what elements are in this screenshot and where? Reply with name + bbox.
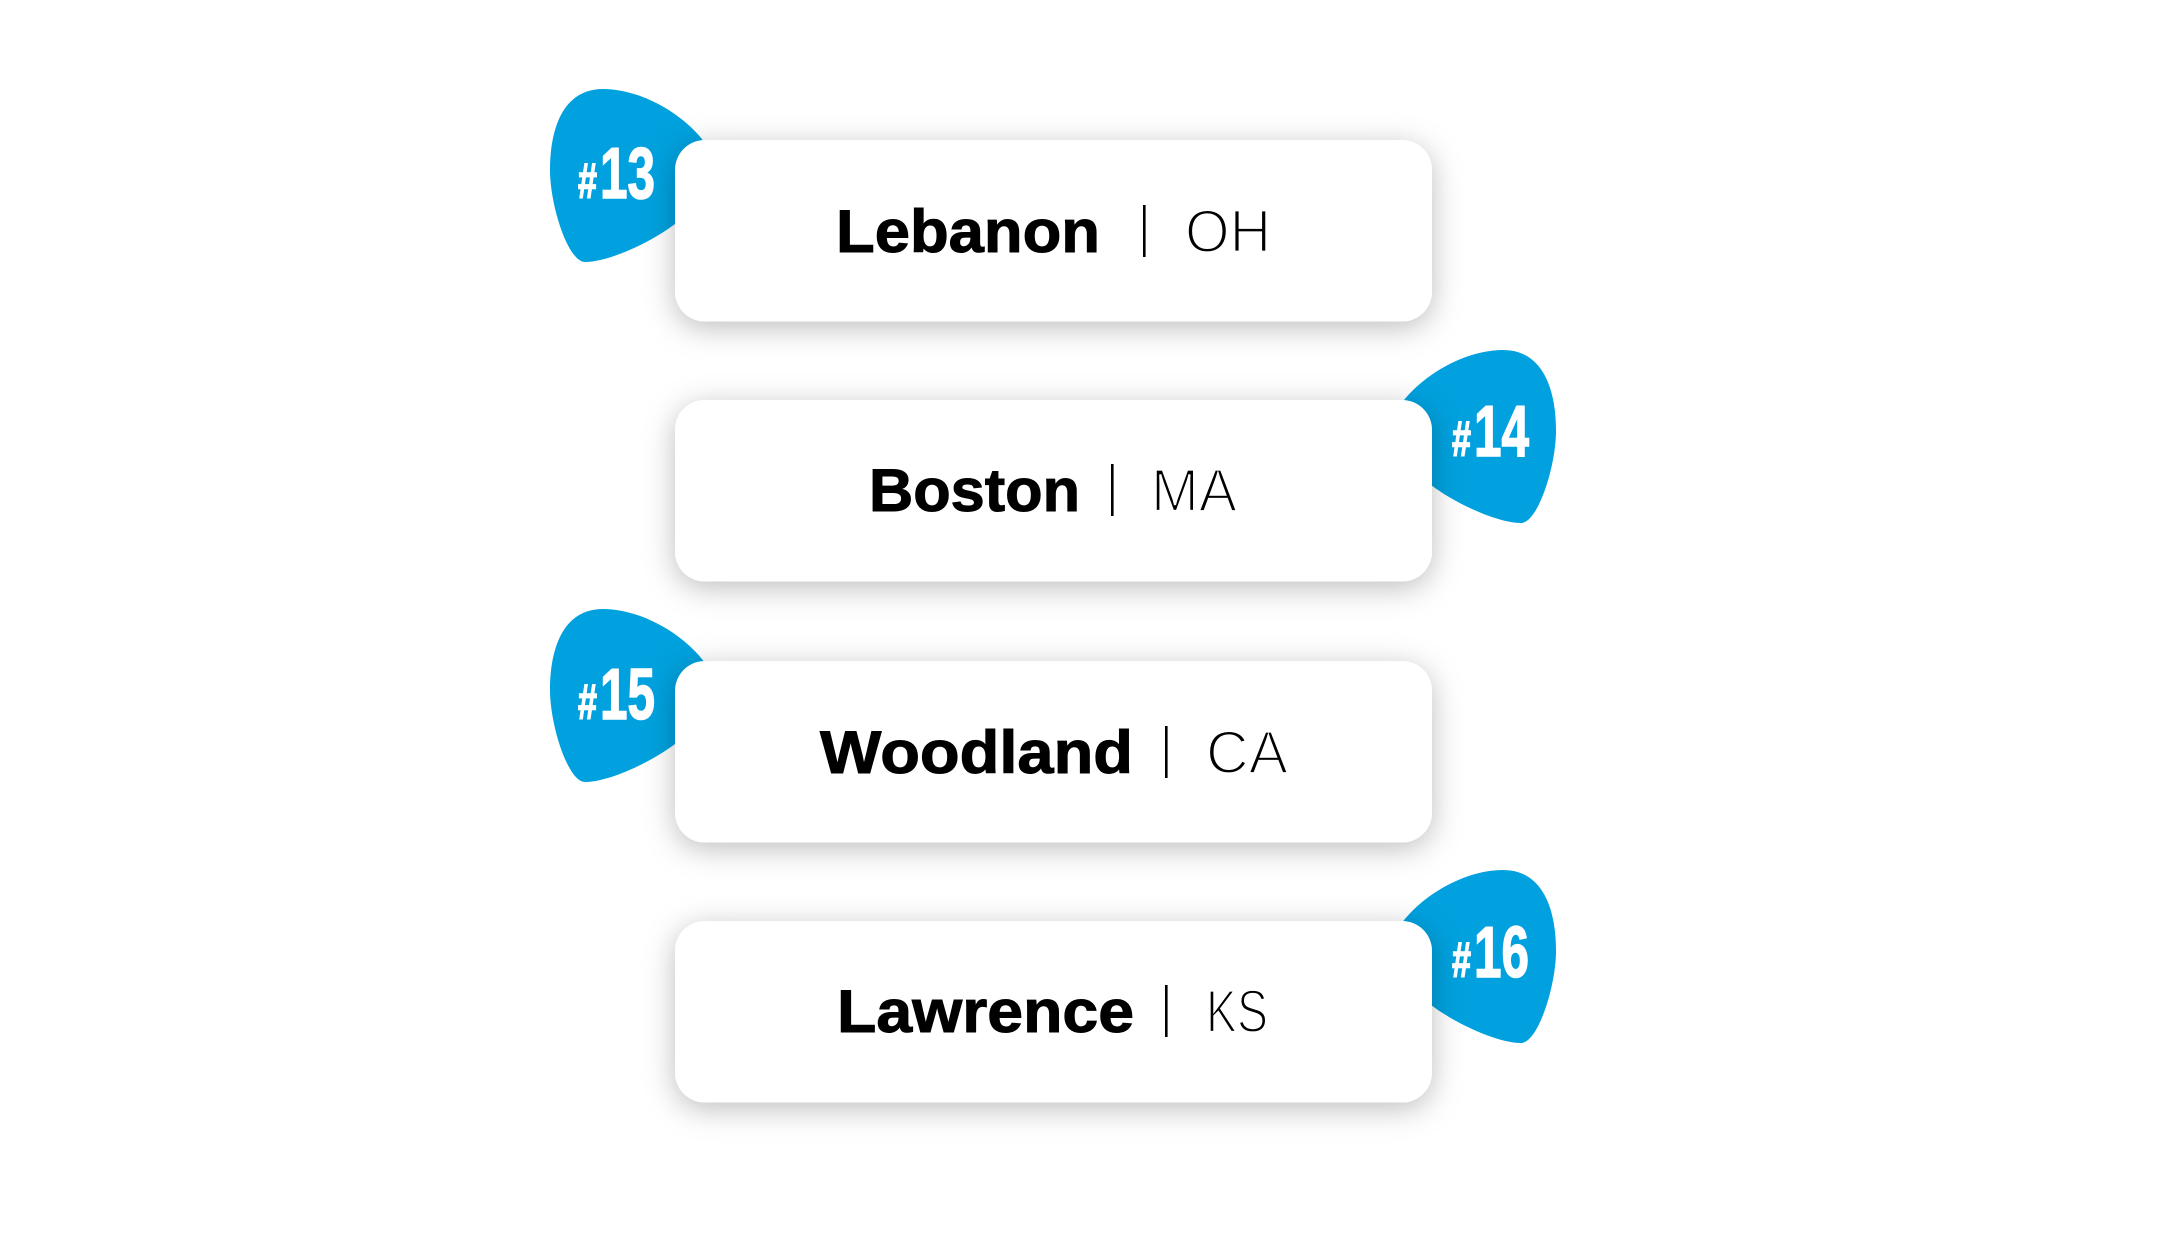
badge: #16 guitar-pick shape <box>1386 870 1556 1043</box>
city name: Lawrence: Lawrence <box>837 978 1134 1045</box>
badge: #16 guitar-pick shape: 16 <box>1474 913 1529 993</box>
badge: #15 guitar-pick shape: # <box>578 674 597 730</box>
city name: Lebanon: Lebanon <box>836 198 1100 265</box>
badge: #14 guitar-pick shape: # <box>1452 411 1471 467</box>
card: Lebanon <box>675 140 1432 322</box>
entry: #13 Lebanon, OH <box>550 89 1432 322</box>
card: Boston <box>675 400 1432 582</box>
badge: #13 guitar-pick shape: # <box>578 153 597 209</box>
card: Lawrence <box>675 921 1432 1102</box>
badge: #15 guitar-pick shape: 15 <box>600 655 655 735</box>
divider bar <box>1111 464 1114 516</box>
state: MA: MA <box>1151 457 1237 524</box>
state: OH: OH <box>1185 198 1271 265</box>
badge: #13 guitar-pick shape <box>550 89 720 262</box>
state: CA: CA <box>1206 719 1288 786</box>
entry: #15 Woodland, CA <box>550 609 1432 842</box>
divider bar <box>1143 205 1146 257</box>
entry: #14 Boston, MA <box>675 350 1556 582</box>
entry: #16 Lawrence, KS <box>675 870 1556 1102</box>
divider bar <box>1165 726 1168 778</box>
state: KS: KS <box>1206 978 1268 1045</box>
city name: Woodland: Woodland <box>820 719 1133 786</box>
badge: #14 guitar-pick shape <box>1386 350 1556 523</box>
badge: #13 guitar-pick shape: 13 <box>600 134 655 214</box>
badge: #14 guitar-pick shape: 14 <box>1474 392 1529 472</box>
card: Woodland <box>675 661 1432 842</box>
divider bar <box>1165 985 1168 1037</box>
city name: Boston: Boston <box>869 457 1080 524</box>
badge: #16 guitar-pick shape: # <box>1452 932 1471 988</box>
badge: #15 guitar-pick shape <box>550 609 720 782</box>
